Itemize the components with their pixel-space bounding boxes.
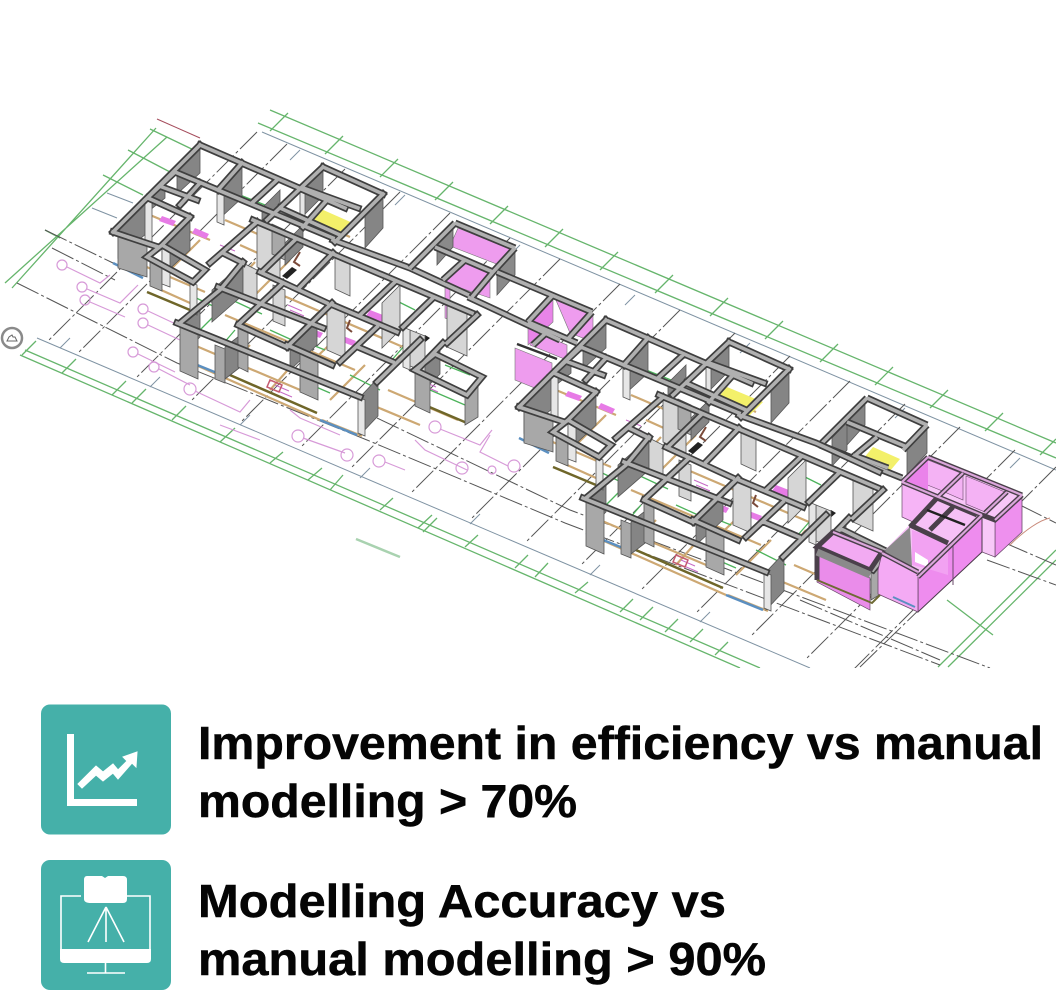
central magenta rooms (437, 225, 593, 395)
stat text 2: manual modelling > 90% (198, 933, 766, 985)
stat text 1: modelling > 70% (198, 775, 577, 827)
yellow stair (308, 209, 900, 471)
stat text 1 (198, 717, 1043, 827)
BIM model: isometric building with grid (2, 110, 1056, 677)
floor details (113, 195, 886, 611)
stat text 2 (198, 875, 766, 985)
icon: laser scanner on tripod with monitor (41, 860, 171, 990)
stray marker lines (157, 119, 400, 557)
icon: growth chart tile (41, 704, 171, 834)
stat text 2: Modelling Accuracy vs (198, 875, 726, 927)
stat 2: accuracy (41, 860, 766, 990)
structural beams, first wing (113, 145, 482, 397)
central beams and end block (410, 223, 927, 478)
second wing beams (519, 320, 888, 572)
repeated walls (118, 145, 884, 611)
plan grid lines (5, 110, 1056, 677)
stat 1: efficiency (41, 704, 1043, 834)
left cloud marker (2, 328, 22, 348)
annotation bubbles and purple dimension lines (57, 260, 520, 474)
stat text 1: Improvement in efficiency vs manual (198, 717, 1043, 769)
magenta end block (817, 457, 1022, 612)
